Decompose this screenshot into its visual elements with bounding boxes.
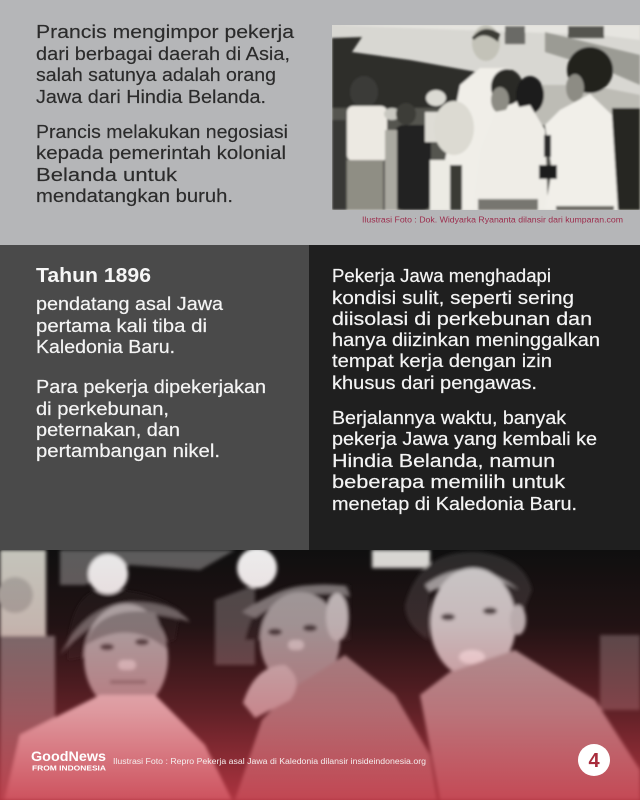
man at left bbox=[350, 76, 378, 104]
logo: GoodNews from Indonesia bbox=[31, 749, 106, 772]
text block: hardship: Pekerja Jawa menghadapi bbox=[332, 265, 551, 286]
heading: Tahun 1896: Tahun 1896 bbox=[36, 265, 151, 287]
text block: employment: pertambangan nikel. bbox=[36, 440, 220, 461]
caption: bottom photo credit: Ilustrasi Foto : Repro Pekerja asal Jawa di Kaledonia dilansir insideindonesia.org bbox=[113, 757, 426, 766]
wall and poster bbox=[0, 550, 46, 636]
panel: left dark grey bbox=[0, 245, 309, 550]
text block: employment bbox=[36, 376, 266, 461]
text block: intro paragraph one: Jawa dari Hindia Belanda. bbox=[36, 86, 266, 107]
miner one bbox=[5, 554, 232, 800]
panel: right near-black bbox=[309, 245, 640, 550]
page number badge bbox=[578, 744, 610, 776]
text block: hardship: kondisi sulit, seperti sering bbox=[332, 287, 574, 308]
text block: arrival: pertama kali tiba di bbox=[36, 315, 207, 336]
text block: return or settle: menetap di Kaledonia Baru. bbox=[332, 493, 577, 514]
miner two bbox=[235, 548, 437, 800]
woman centre bbox=[491, 69, 523, 105]
woman right bbox=[567, 47, 613, 93]
text block: hardship: hanya diizinkan meninggalkan bbox=[332, 329, 600, 350]
text block: intro paragraph two: Belanda untuk bbox=[36, 164, 178, 185]
text block: hardship: khusus dari pengawas. bbox=[332, 372, 537, 393]
text block: intro paragraph one: Prancis mengimpor pekerja bbox=[36, 21, 295, 42]
text block: intro paragraph two: Prancis melakukan negosiasi bbox=[36, 121, 288, 142]
panel: top grey background bbox=[0, 0, 640, 245]
text block: hardship bbox=[332, 265, 600, 393]
gradient: red overlay bbox=[0, 583, 640, 800]
text block: return or settle: Berjalannya waktu, banyak bbox=[332, 407, 567, 428]
text block: intro paragraph two bbox=[36, 121, 288, 206]
text block: hardship: tempat kerja dengan izin bbox=[332, 350, 552, 371]
text block: intro paragraph one bbox=[36, 21, 295, 107]
text block: arrival bbox=[36, 293, 224, 357]
text block: intro paragraph two: kepada pemerintah kolonial bbox=[36, 142, 286, 163]
text block: intro paragraph two: mendatangkan buruh. bbox=[36, 185, 233, 206]
text block: return or settle bbox=[332, 407, 597, 514]
logo: GoodNews from Indonesia: GoodNews bbox=[31, 749, 106, 764]
text block: intro paragraph one: salah satunya adalah orang bbox=[36, 64, 276, 85]
text block: employment: peternakan, dan bbox=[36, 419, 180, 440]
page number badge: 4 bbox=[588, 750, 600, 772]
text block: employment: di perkebunan, bbox=[36, 398, 169, 419]
text block: arrival: Kaledonia Baru. bbox=[36, 336, 175, 357]
photo: workers arriving at the ship bbox=[332, 25, 640, 210]
text block: return or settle: Hindia Belanda, namun bbox=[332, 450, 555, 471]
text block: intro paragraph one: dari berbagai daerah di Asia, bbox=[36, 43, 290, 64]
tall man bbox=[445, 68, 525, 210]
photo: three miners with red gradient bbox=[0, 548, 640, 800]
text block: hardship: diisolasi di perkebunan dan bbox=[332, 308, 592, 329]
hats bbox=[426, 90, 446, 106]
caption: top photo credit: Ilustrasi Foto : Dok. Widyarka Ryananta dilansir dari kumparan.com bbox=[362, 216, 623, 224]
dark-dressed figure bbox=[395, 125, 431, 210]
logo: GoodNews from Indonesia: FROM INDONESIA bbox=[32, 766, 106, 772]
text block: employment: Para pekerja dipekerjakan bbox=[36, 376, 266, 397]
text block: arrival: pendatang asal Jawa bbox=[36, 293, 224, 314]
text block: return or settle: beberapa memilih untuk bbox=[332, 471, 566, 492]
text block: return or settle: pekerja Jawa yang kembali ke bbox=[332, 428, 597, 449]
miner three bbox=[405, 552, 640, 800]
